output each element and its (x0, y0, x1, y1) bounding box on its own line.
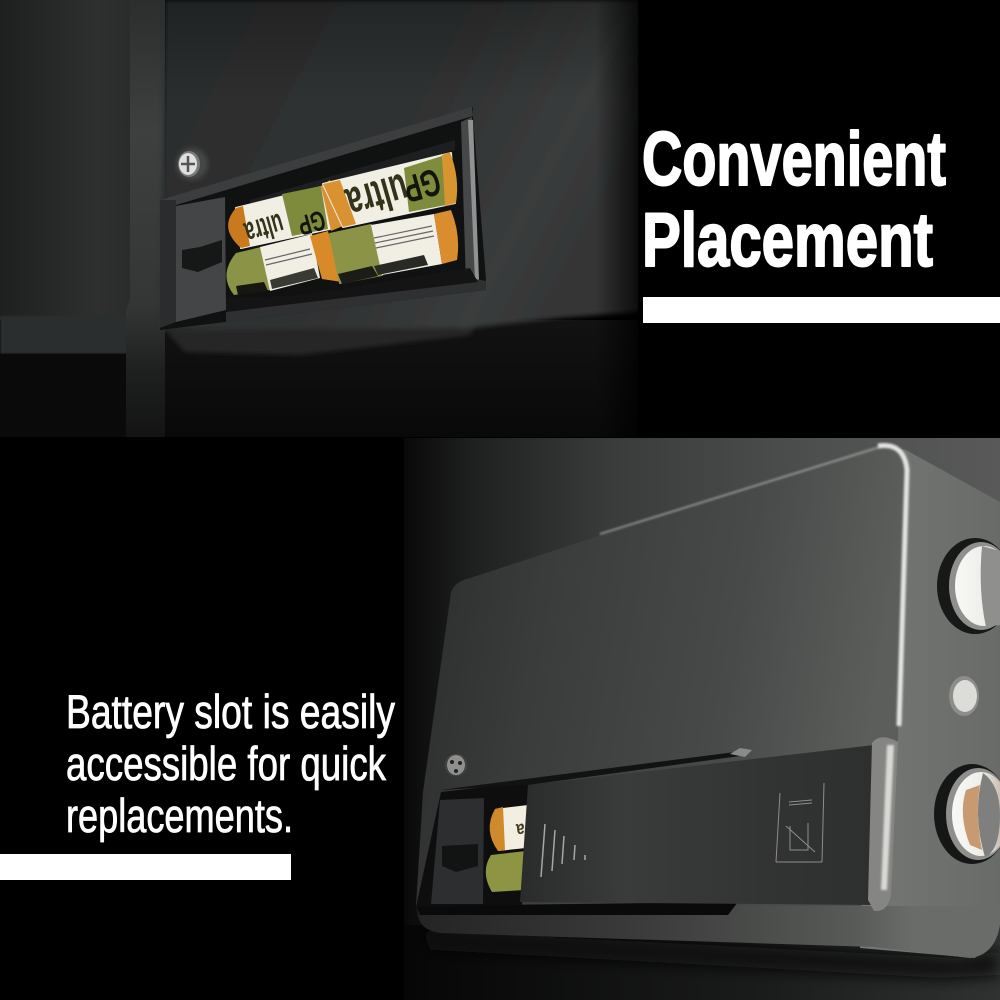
icon: slide ribs (541, 824, 585, 877)
upper edge highlight (600, 447, 880, 534)
open battery slot (416, 782, 532, 907)
icon: upper lock knob (937, 538, 1000, 634)
cover chrome corner (868, 737, 898, 911)
under-tray lip shadow (168, 328, 474, 356)
battery: lower peek (486, 851, 526, 892)
battery: top left: GP (294, 203, 329, 240)
icon: small button (949, 676, 979, 716)
battery tray housing (160, 107, 486, 330)
battery: bottom left (226, 231, 342, 295)
cover seam (440, 752, 740, 790)
text block: battery slot description: Battery slot is easily (66, 685, 395, 738)
left wall (0, 0, 130, 320)
lower lip (416, 906, 1000, 958)
battery: top right (323, 152, 457, 229)
safe door surface (160, 0, 660, 330)
panel: battery compartment photo (0, 0, 638, 437)
icon: screw (444, 754, 468, 776)
corner highlight (878, 446, 907, 726)
text block: battery slot description: accessible for quick (66, 737, 386, 790)
lid face (416, 446, 906, 906)
sliding cover plate (440, 737, 898, 911)
tray front lip (226, 268, 478, 312)
side face (860, 445, 1000, 958)
icon: screw (176, 148, 208, 180)
description underline bar (0, 854, 291, 880)
panel: closed battery cover photo (404, 438, 1000, 1000)
heading: Convenient Placement (642, 117, 946, 283)
vertical door frame (126, 0, 165, 437)
battery: top left: ultra (240, 206, 287, 250)
lower dark door area (160, 320, 640, 437)
wall surface (404, 438, 1000, 938)
icon: battery symbol (776, 783, 824, 862)
battery: top right: ultra (340, 163, 414, 229)
safe lock box (416, 445, 1000, 978)
battery: top right: GP (399, 160, 445, 211)
text block: battery slot description: replacements. (66, 789, 293, 842)
heading underline bar (643, 297, 1000, 323)
battery: upper peek: ra (515, 819, 532, 842)
battery: top left (228, 180, 343, 250)
icon: lower lock knob (934, 764, 1000, 864)
battery: bottom right (330, 210, 458, 284)
shelf edge (0, 316, 128, 354)
box shadow (576, 938, 1000, 984)
text block: battery slot description (66, 685, 395, 842)
